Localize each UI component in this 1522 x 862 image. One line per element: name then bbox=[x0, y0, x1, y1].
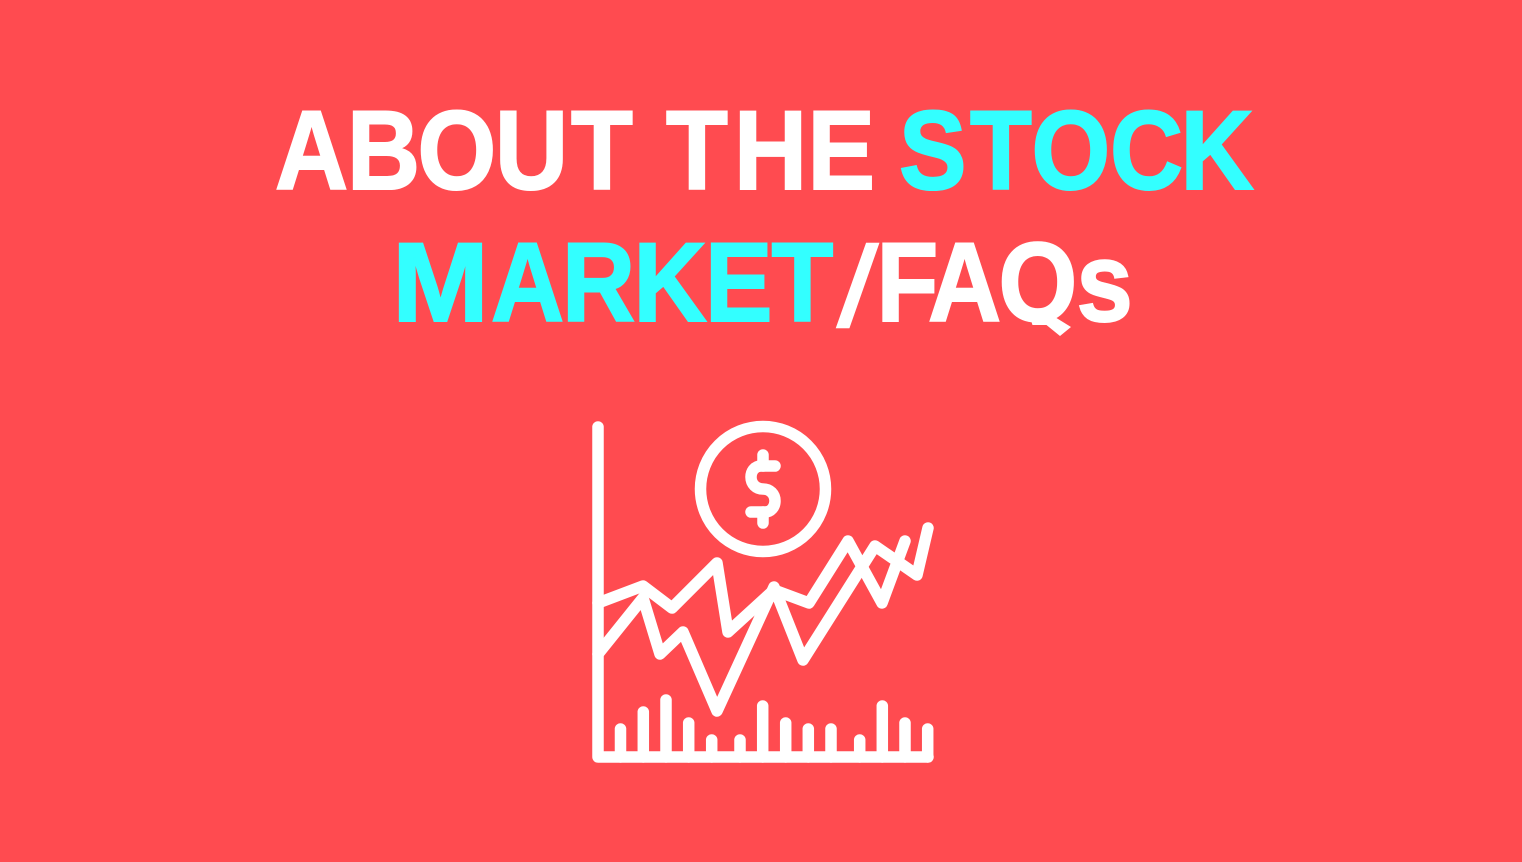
title line 2: FAQs bbox=[876, 219, 1133, 345]
icon: stock chart with dollar coin bbox=[598, 426, 928, 757]
volume bars bbox=[620, 700, 928, 757]
title line 1: THE bbox=[666, 87, 875, 213]
chart axes bbox=[598, 427, 928, 757]
title line 1: ABOUT bbox=[275, 87, 633, 213]
title line 2: M bbox=[392, 219, 489, 345]
title line 2 bbox=[392, 219, 1133, 351]
title bbox=[275, 87, 1254, 351]
lower price line bbox=[598, 528, 928, 711]
title line 1: STOCK bbox=[899, 87, 1254, 213]
title line 2: ARKET bbox=[491, 219, 833, 345]
upper price line bbox=[598, 541, 905, 632]
title line 2: / bbox=[831, 222, 884, 351]
title line 1 bbox=[275, 87, 1254, 213]
icon: dollar coin bbox=[700, 426, 826, 552]
